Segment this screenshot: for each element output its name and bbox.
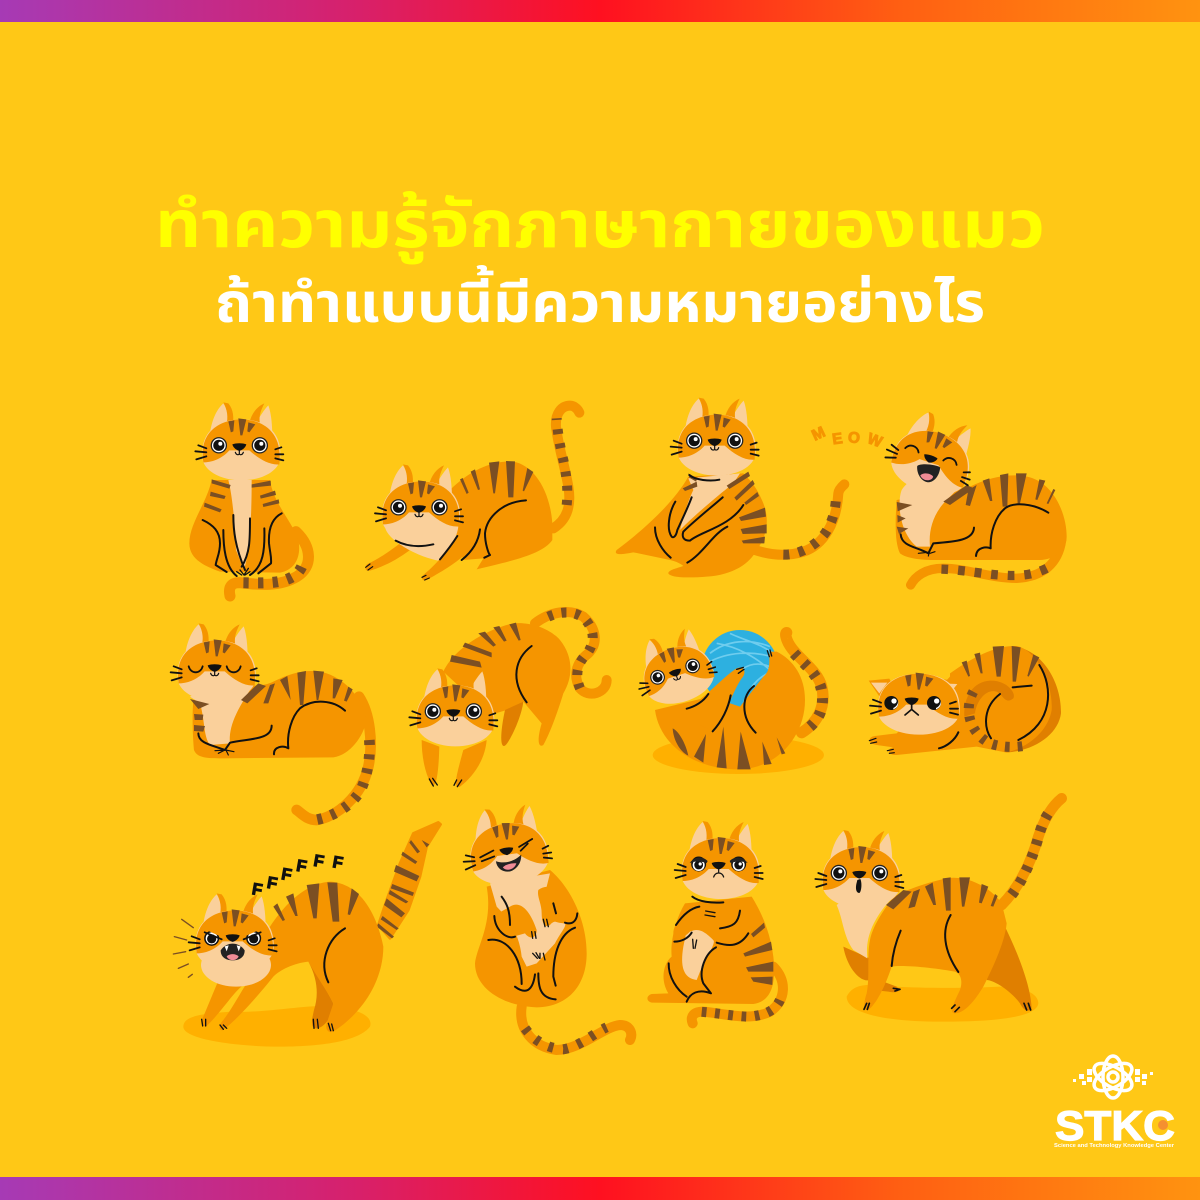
logo atom emblem <box>1090 1056 1136 1098</box>
top gradient bar <box>0 0 1200 22</box>
cat 2: crouching <box>365 406 579 580</box>
cat 5: sleeping <box>171 623 371 820</box>
meow sound text: O <box>847 429 861 447</box>
cat 4: lying and meowing <box>878 403 1067 585</box>
cat 10: lying on back laughing <box>457 801 631 1050</box>
logo: STKC: Science and Technology Knowledge Center <box>1054 1143 1175 1149</box>
cat 12: surprised standing <box>815 798 1062 1022</box>
logo: STKC <box>1054 1056 1175 1149</box>
subtitle: ถ้าทำแบบนี้มีความหมายอย่างไร <box>215 264 985 334</box>
meow sound text: E <box>831 430 844 448</box>
cat 6: bowing forward <box>409 612 607 787</box>
cat 1: sitting <box>189 402 308 596</box>
hissing text: F <box>331 852 345 873</box>
hissing text: F <box>251 879 264 900</box>
hissing text: F <box>312 851 326 871</box>
meow sound text: M <box>809 424 828 444</box>
meow sound text: W <box>865 430 885 451</box>
bottom gradient bar <box>0 1177 1200 1200</box>
cat 9: angry arched back <box>173 822 441 1047</box>
cat 8: curled up and grumpy <box>869 646 1061 755</box>
hissing text: F <box>266 873 279 893</box>
hissing text: F <box>280 864 293 885</box>
yarn ball <box>702 630 778 707</box>
logo: STKC: STKC <box>1055 1102 1175 1149</box>
title: ทำความรู้จักภาษากายของแมว <box>155 187 1045 264</box>
meow sound text <box>809 424 885 451</box>
cat 3: sitting with meow <box>616 398 885 577</box>
cat 7: playing with blue yarn ball <box>625 623 824 774</box>
cat 11: sad sitting <box>647 821 783 1023</box>
hissing text <box>251 851 345 900</box>
hissing text: F <box>295 856 308 876</box>
